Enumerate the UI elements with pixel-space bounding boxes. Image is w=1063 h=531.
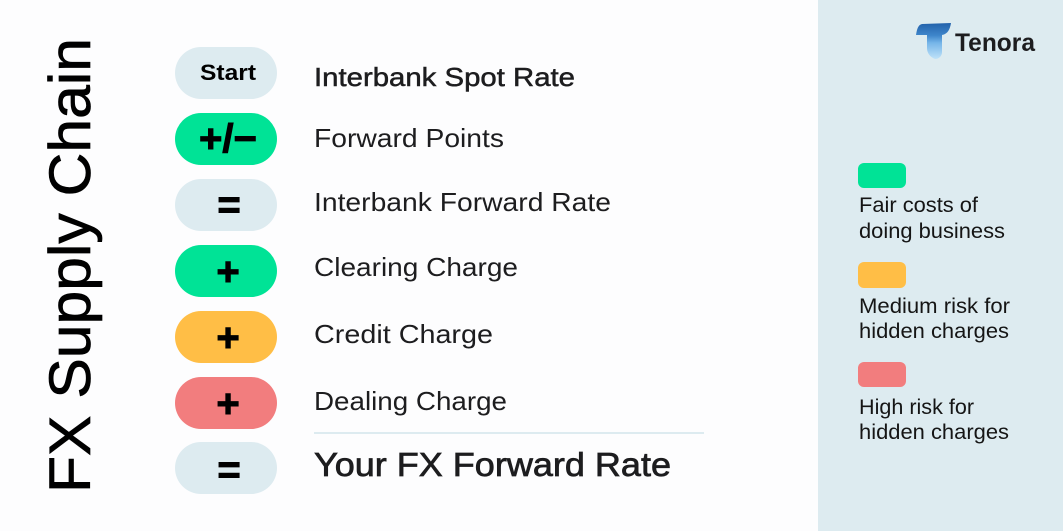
step: your fx forward rate: = bbox=[217, 448, 241, 492]
step: credit charge: + bbox=[216, 316, 240, 360]
step: credit charge: Credit Charge bbox=[314, 319, 493, 349]
title: FX Supply Chain bbox=[38, 38, 103, 493]
legend: fair costs: Fair costs of bbox=[859, 194, 978, 217]
step: dealing charge: + bbox=[216, 382, 240, 426]
logo: Tenora bbox=[916, 23, 1036, 59]
legend: high risk: hidden charges bbox=[859, 421, 1009, 444]
legend: medium risk: Medium risk for bbox=[859, 295, 1010, 318]
step: dealing charge bbox=[175, 377, 507, 429]
legend: medium risk: hidden charges bbox=[859, 320, 1009, 343]
step: interbank forward rate: = bbox=[217, 183, 241, 227]
step: clearing charge bbox=[175, 245, 518, 297]
step: clearing charge: Clearing Charge bbox=[314, 252, 518, 282]
step: your fx forward rate: Your FX Forward Rate bbox=[314, 446, 671, 483]
step: your fx forward rate bbox=[175, 442, 671, 494]
legend: medium risk bbox=[858, 262, 1010, 343]
logo: Tenora: Tenora bbox=[955, 29, 1036, 57]
step: clearing charge: + bbox=[216, 250, 240, 294]
step: interbank spot rate bbox=[175, 47, 575, 99]
step: interbank forward rate: Interbank Forward Rate bbox=[314, 187, 611, 217]
step: interbank spot rate: Interbank Spot Rate bbox=[314, 62, 575, 92]
step: interbank spot rate: Start bbox=[200, 60, 257, 85]
step: forward points: Forward Points bbox=[314, 123, 504, 153]
panel: supply chain steps bbox=[175, 47, 704, 494]
step: credit charge bbox=[175, 311, 493, 363]
legend: fair costs: doing business bbox=[859, 220, 1005, 243]
step: forward points: +/− bbox=[199, 117, 257, 161]
legend: fair costs bbox=[858, 163, 1005, 243]
step: interbank forward rate bbox=[175, 179, 611, 231]
panel: legend sidebar bbox=[818, 0, 1063, 531]
legend: high risk bbox=[858, 362, 1009, 444]
legend: high risk: High risk for bbox=[859, 396, 974, 419]
step: forward points bbox=[175, 113, 504, 165]
step: dealing charge: Dealing Charge bbox=[314, 386, 507, 416]
